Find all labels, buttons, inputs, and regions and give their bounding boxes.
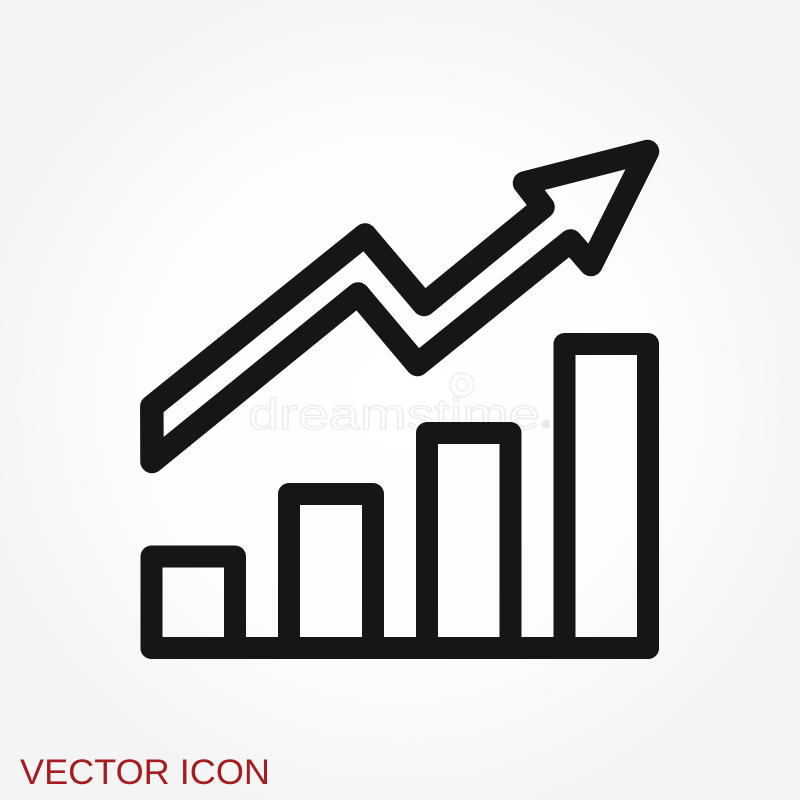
watermark: dreamstime <box>248 390 540 439</box>
chart baseline <box>152 637 648 659</box>
first bar <box>152 556 235 648</box>
second bar <box>289 494 373 648</box>
watermark <box>248 373 550 439</box>
icon: rising arrow <box>152 152 648 462</box>
fourth bar <box>564 344 648 648</box>
third bar <box>427 433 510 648</box>
caption: vector icon: VECTOR ICON <box>20 753 270 792</box>
bar chart icon <box>152 344 648 648</box>
